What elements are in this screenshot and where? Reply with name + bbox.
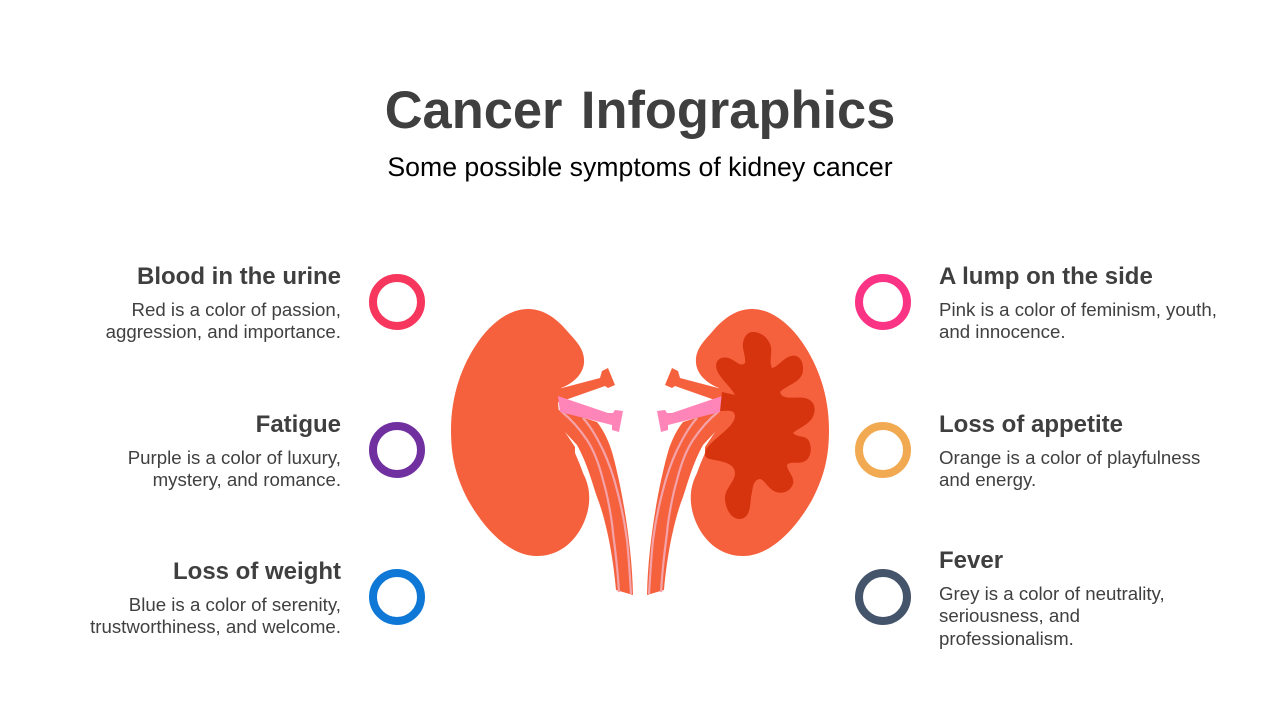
subtitle: Some possible symptoms of kidney cancer xyxy=(387,152,893,182)
text: fever: Grey is a color of neutrality, xyxy=(939,583,1165,604)
heading: fatigue: Fatigue xyxy=(256,411,341,438)
text: loss of appetite: Orange is a color of playfulness xyxy=(939,447,1200,468)
text: loss of weight: trustworthiness, and welcome. xyxy=(90,616,341,637)
text: a lump on the side xyxy=(939,299,1217,342)
right kidney xyxy=(647,309,829,595)
text: loss of weight xyxy=(90,594,341,637)
icon: purple ring xyxy=(373,426,421,474)
text: loss of appetite xyxy=(939,447,1200,490)
text: blood in the urine: Red is a color of passion, xyxy=(132,299,341,320)
left kidney xyxy=(451,309,633,595)
icon: blue ring xyxy=(373,573,421,621)
icon: orange ring xyxy=(859,426,907,474)
heading: loss of weight: Loss of weight xyxy=(173,558,341,585)
text: fatigue: Purple is a color of luxury, xyxy=(128,447,341,468)
heading: a lump on the side: A lump on the side xyxy=(939,263,1153,290)
text: loss of appetite: and energy. xyxy=(939,469,1036,490)
heading: loss of appetite: Loss of appetite xyxy=(939,411,1123,438)
text: blood in the urine: aggression, and importance. xyxy=(106,321,341,342)
title: Cancer Infographics xyxy=(385,82,895,140)
icon: grey ring xyxy=(859,573,907,621)
text: fatigue xyxy=(128,447,341,490)
icon: pink ring xyxy=(859,278,907,326)
text: fever: professionalism. xyxy=(939,628,1074,649)
text: blood in the urine xyxy=(106,299,341,342)
text: fatigue: mystery, and romance. xyxy=(153,469,341,490)
text: loss of weight: Blue is a color of serenity, xyxy=(129,594,341,615)
icon: red ring xyxy=(373,278,421,326)
text: fever: seriousness, and xyxy=(939,605,1080,626)
text: fever xyxy=(939,583,1165,649)
text: a lump on the side: Pink is a color of feminism, youth, xyxy=(939,299,1217,320)
heading: fever: Fever xyxy=(939,547,1003,574)
text: a lump on the side: and innocence. xyxy=(939,321,1066,342)
heading: blood in the urine: Blood in the urine xyxy=(137,263,341,290)
